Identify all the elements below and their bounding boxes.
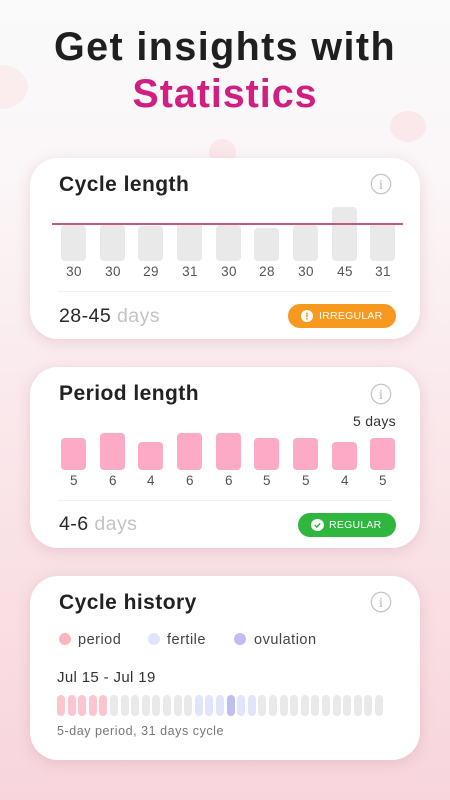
icon: info — [370, 174, 392, 194]
badge: irregular — [288, 304, 396, 328]
bar chart: period length: 4 — [147, 473, 155, 488]
icon: info: i — [379, 596, 383, 611]
bar chart: cycle length: 30 — [298, 264, 314, 279]
panel: cycle length — [30, 158, 420, 339]
legend: period, fertile, ovulation: ovulation — [254, 632, 317, 648]
icon: info: i — [379, 178, 383, 193]
bar chart: period length: 5 — [263, 473, 271, 488]
heading: period length: Period length — [59, 382, 199, 405]
bar chart: cycle length: 31 — [375, 264, 391, 279]
caption: 5-day period, 31 days cycle — [57, 724, 224, 738]
bar chart: cycle length: 31 — [182, 264, 198, 279]
bar chart: period length: 4 — [341, 473, 349, 488]
bar chart: cycle length: 30 — [221, 264, 237, 279]
bar chart: cycle length — [52, 207, 403, 279]
range text: 4-6 days: 4-6 days — [59, 513, 137, 535]
bar chart: period length: 5 — [70, 473, 78, 488]
label: 5 days: 5 days — [353, 413, 396, 429]
cycle strip — [57, 695, 383, 716]
panel: cycle history — [30, 576, 420, 760]
bar chart: cycle length: 29 — [143, 264, 159, 279]
range text: 28-45 days: 28-45 days — [59, 305, 160, 327]
title line: Statistics: Statistics — [132, 72, 318, 116]
bar chart: cycle length: 30 — [105, 264, 121, 279]
bar chart: period length: 6 — [225, 473, 233, 488]
icon: info — [370, 384, 392, 404]
badge: irregular: IRREGULAR — [319, 310, 383, 322]
background blob left — [0, 65, 28, 109]
heading: cycle length: Cycle length — [59, 173, 189, 196]
badge: regular — [298, 513, 396, 537]
bar chart: period length: 5 — [379, 473, 387, 488]
bar chart: period length: 6 — [186, 473, 194, 488]
bar chart: cycle length: 30 — [66, 264, 82, 279]
heading: cycle history: Cycle history — [59, 591, 197, 614]
badge: regular: REGULAR — [329, 519, 382, 531]
legend: period, fertile, ovulation: fertile — [167, 632, 206, 648]
icon: warning — [301, 310, 313, 322]
background blob center — [209, 139, 236, 165]
icon: check — [311, 519, 324, 531]
bar chart: period length — [61, 433, 395, 488]
icon: info: i — [379, 388, 383, 403]
panel: period length — [30, 367, 420, 548]
title line: Get insights with: Get insights with — [54, 25, 396, 69]
bar chart: cycle length: 45 — [337, 264, 353, 279]
legend: period, fertile, ovulation: period — [78, 632, 121, 648]
background blob right — [390, 111, 426, 142]
legend: period, fertile, ovulation — [59, 632, 317, 648]
bar chart: period length: 5 — [302, 473, 310, 488]
icon: info — [370, 592, 392, 612]
bar chart: period length: 6 — [109, 473, 117, 488]
date range: Jul 15 - Jul 19 — [57, 669, 156, 686]
bar chart: cycle length: 28 — [259, 264, 275, 279]
